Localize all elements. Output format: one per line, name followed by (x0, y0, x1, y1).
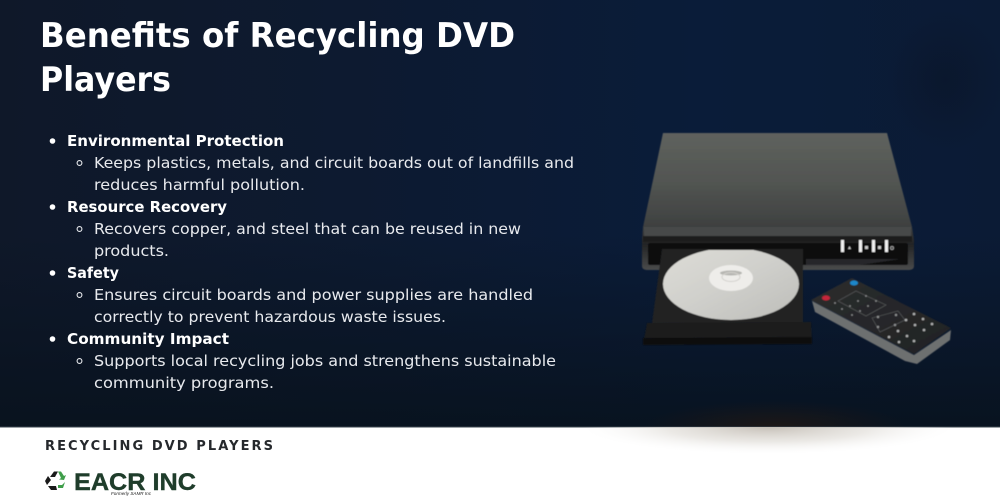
player front face (642, 227, 914, 270)
panel: benefits list (50, 132, 574, 392)
item: environmental protection (50, 132, 574, 194)
panel: white footer band (0, 426, 1000, 452)
remote control (811, 278, 951, 364)
player top cover (643, 133, 912, 227)
title: Players (40, 60, 171, 100)
item: community impact: Community Impact (67, 330, 230, 348)
item: resource recovery: Recovers copper, and steel that can be reused in new (94, 220, 521, 238)
item: resource recovery: products. (94, 242, 169, 260)
item: environmental protection: reduces harmful pollution. (94, 176, 305, 194)
icon: recycling arrows (45, 472, 66, 490)
item: community impact: Supports local recycling jobs and strengthens sustainable (94, 352, 556, 370)
icon: DVD player with disc tray and remote (642, 133, 951, 364)
footer heading: RECYCLING DVD PLAYERS (45, 439, 273, 454)
item: safety (50, 264, 533, 326)
remote button outlines (838, 291, 905, 332)
item: community impact: community programs. (94, 374, 274, 392)
footer shadow (588, 427, 948, 448)
item: safety: Ensures circuit boards and power supplies are handled (94, 286, 533, 304)
title (40, 16, 515, 100)
disc (663, 248, 799, 320)
title: Benefits of Recycling DVD (40, 16, 515, 56)
disc tray (643, 249, 812, 345)
item: resource recovery: Resource Recovery (67, 198, 227, 216)
item: community impact (50, 330, 556, 392)
item: resource recovery (50, 198, 521, 260)
item: safety: correctly to prevent hazardous waste issues. (94, 308, 446, 326)
item: environmental protection: Keeps plastics, metals, and circuit boards out of landfills and (94, 154, 574, 172)
item: environmental protection: Environmental Protection (67, 132, 284, 150)
logo: EACR INC: Formerly SAMR Inc (111, 491, 152, 496)
logo: EACR INC: EACR INC (74, 469, 196, 496)
control buttons (841, 240, 894, 252)
item: safety: Safety (67, 264, 119, 282)
